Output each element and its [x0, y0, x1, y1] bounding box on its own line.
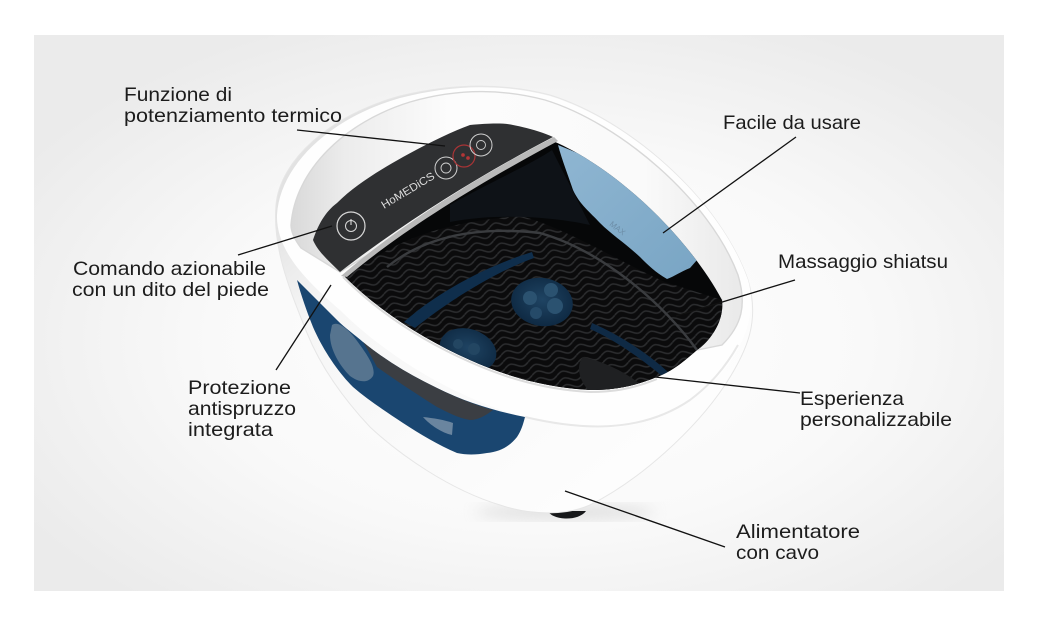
panel edge strip — [341, 137, 558, 277]
temperature button — [470, 134, 492, 156]
rim lower crease — [525, 345, 738, 426]
leader: massaggio — [676, 280, 795, 316]
reflection oval — [330, 324, 374, 381]
side window — [297, 280, 525, 454]
device body — [275, 86, 753, 513]
water level window — [558, 145, 697, 279]
label: funzione di potenziamento termico: Funzione di — [124, 84, 232, 106]
tub interior — [344, 142, 722, 390]
rear wall reflections — [450, 150, 590, 225]
reflection small — [423, 417, 453, 435]
label: facile da usare: Facile da usare — [723, 112, 861, 134]
label: massaggio shiatsu: Massaggio shiatsu — [778, 251, 948, 273]
translucent lid band — [291, 92, 742, 350]
label: comando azionabile: con un dito del piede — [72, 279, 269, 301]
device shadow — [475, 505, 655, 519]
label: alimentatore con cavo: con cavo — [736, 542, 819, 564]
foot bath device — [275, 86, 753, 519]
leader: facile — [663, 137, 796, 233]
centre massager — [511, 278, 573, 326]
tub interior: MAX — [608, 219, 627, 238]
shiatsu button — [435, 157, 457, 179]
small massager — [440, 328, 496, 368]
power button — [337, 212, 365, 240]
label: alimentatore con cavo: Alimentatore — [736, 521, 860, 543]
label: protezione antispruzzo integrata: integrata — [188, 419, 273, 441]
leader: alimentatore — [565, 491, 725, 547]
tub front lip shadow — [343, 277, 657, 392]
control panel — [313, 124, 553, 272]
heat boost button — [453, 145, 475, 167]
label: protezione antispruzzo integrata: Protezione — [188, 377, 291, 399]
blue strip right — [590, 323, 668, 376]
brand logo: HoMEDiCS — [379, 170, 437, 212]
leader: funzione — [297, 130, 445, 146]
floor arc — [387, 231, 697, 350]
label: funzione di potenziamento termico: potenziamento termico — [124, 105, 342, 127]
leader: protezione — [276, 285, 331, 370]
label: protezione antispruzzo integrata: antispruzzo — [188, 398, 296, 420]
leader: comando — [238, 226, 332, 255]
rubber foot — [548, 511, 586, 519]
side window see-through — [363, 342, 493, 420]
blue strip left — [404, 252, 534, 328]
label: comando azionabile: Comando azionabile — [73, 258, 266, 280]
wave-textured floor — [345, 216, 725, 395]
leader: esperienza — [655, 377, 800, 393]
rim lid — [277, 87, 751, 428]
label: esperienza personalizzabile: personalizzabile — [800, 409, 952, 431]
roller — [579, 357, 640, 392]
label: esperienza personalizzabile: Esperienza — [800, 388, 904, 410]
